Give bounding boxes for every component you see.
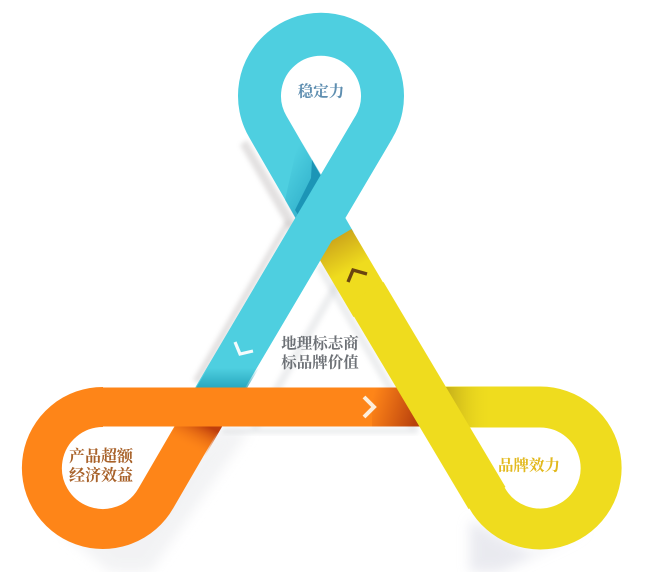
ribbon: teal right leg on top xyxy=(196,127,374,410)
icon: yellow dark chevron xyxy=(348,270,367,282)
label: economic benefit: 产品超额 xyxy=(69,446,134,466)
icon: teal white chevron xyxy=(235,342,253,354)
shading: orange leg under band xyxy=(165,425,223,458)
center title xyxy=(281,334,359,372)
shading: soft fold on left leg xyxy=(285,137,330,235)
label: stability: 稳定力 xyxy=(298,82,344,100)
shading: yellow tail under diagonal xyxy=(445,387,492,427)
shading: teal foot under orange xyxy=(196,368,259,388)
ribbon: yellow upper end xyxy=(333,240,372,306)
shading: dark fold triangle xyxy=(295,160,322,218)
ribbon: yellow lower band with loop xyxy=(365,293,601,529)
label: brand effect: 品牌效力 xyxy=(498,456,560,474)
ribbon: orange horizontal band xyxy=(100,388,432,426)
center title: 标品牌价值 xyxy=(281,352,359,372)
shading: orange right end xyxy=(372,388,432,426)
cast shadows xyxy=(60,140,590,572)
ribbon: orange lower leg xyxy=(42,405,223,529)
center title: 地理标志商 xyxy=(281,334,359,352)
icon: orange white chevron xyxy=(364,397,374,417)
label: economic benefit xyxy=(69,446,134,484)
ribbon: teal loop with left leg xyxy=(207,34,382,410)
label: economic benefit: 经济效益 xyxy=(69,466,133,484)
